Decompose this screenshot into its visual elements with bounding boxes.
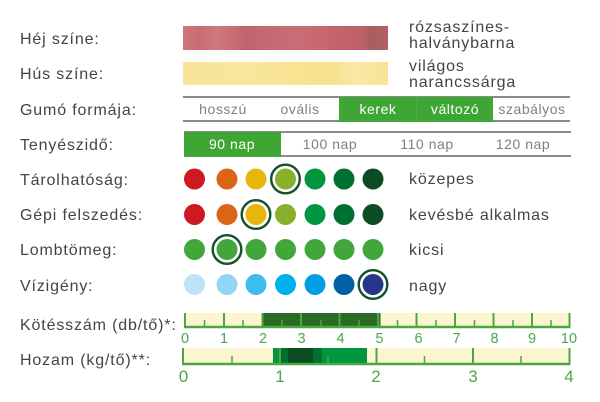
axis labels: 4 bbox=[336, 331, 345, 347]
row: flesh colour bbox=[20, 58, 516, 91]
axis labels: 2 bbox=[259, 331, 267, 347]
option: szabályos: szabályos bbox=[498, 101, 566, 117]
axis labels: 0 bbox=[181, 331, 189, 347]
axis labels: 2 bbox=[371, 367, 381, 386]
axis labels: 1 bbox=[275, 367, 285, 386]
value: flesh colour: világos bbox=[409, 58, 465, 75]
value: skin colour: rózsaszínes- bbox=[409, 19, 510, 36]
row: water demand bbox=[20, 270, 447, 299]
label: flesh colour: Hús színe: bbox=[20, 66, 104, 83]
option: kerek: kerek bbox=[360, 101, 397, 117]
axis labels: 3 bbox=[468, 367, 478, 386]
row: yield bbox=[20, 348, 574, 386]
label: growing period: Tenyészidő: bbox=[20, 137, 114, 154]
scale dots: mechanical harvesting bbox=[184, 200, 384, 229]
option: változó: változó bbox=[431, 101, 479, 117]
option: ovális: ovális bbox=[280, 101, 320, 117]
axis labels bbox=[179, 367, 574, 386]
value: storability: közepes bbox=[409, 171, 475, 188]
swatch: skin colour bbox=[183, 26, 388, 50]
axis labels: 0 bbox=[179, 367, 188, 386]
range bar: 2 to 5 bbox=[262, 313, 380, 327]
row: mechanical harvesting bbox=[20, 200, 550, 229]
option: 120 nap: 120 nap bbox=[496, 136, 550, 152]
axis labels: 10 bbox=[561, 331, 577, 347]
axis labels: 8 bbox=[490, 331, 499, 347]
value: flesh colour: narancssárga bbox=[409, 74, 516, 91]
label: fruit set: Kötésszám (db/tő)*: bbox=[20, 317, 177, 334]
axis labels: 3 bbox=[297, 331, 306, 347]
axis labels: 6 bbox=[414, 331, 423, 347]
selected period segment bbox=[184, 132, 281, 157]
axis labels: 4 bbox=[564, 367, 574, 386]
axis labels: 7 bbox=[452, 331, 461, 347]
axis chart: yield bbox=[179, 348, 574, 386]
value: skin colour: halványbarna bbox=[409, 35, 515, 52]
range bar: yield distribution bbox=[273, 348, 367, 364]
row: storability bbox=[20, 165, 475, 193]
value: water demand: nagy bbox=[409, 278, 447, 295]
option: hosszú: hosszú bbox=[199, 101, 247, 117]
swatch: flesh colour bbox=[183, 62, 388, 85]
label: foliage: Lombtömeg: bbox=[20, 242, 117, 259]
label: tuber shape: Gumó formája: bbox=[20, 102, 137, 119]
selected shape segment bbox=[339, 97, 493, 122]
axis labels: 9 bbox=[528, 331, 536, 347]
label: yield: Hozam (kg/tő)**: bbox=[20, 352, 151, 369]
value: mechanical harvesting: kevésbé alkalmas bbox=[409, 207, 550, 224]
option: 100 nap: 100 nap bbox=[303, 136, 357, 152]
axis labels: 1 bbox=[220, 331, 228, 347]
scale dots: foliage bbox=[184, 235, 384, 264]
label: mechanical harvesting: Gépi felszedés: bbox=[20, 207, 143, 224]
option: 110 nap: 110 nap bbox=[400, 136, 454, 152]
scale dots: storability bbox=[184, 165, 384, 193]
axis chart: fruit set bbox=[181, 313, 577, 347]
axis labels bbox=[181, 331, 577, 347]
label: storability: Tárolhatóság: bbox=[20, 172, 129, 189]
row: tuber shape bbox=[20, 96, 570, 122]
axis labels: 5 bbox=[375, 331, 384, 347]
row: fruit set bbox=[20, 313, 577, 347]
row: growing period bbox=[20, 131, 571, 157]
value: foliage: kicsi bbox=[409, 242, 444, 259]
label: skin colour: Héj színe: bbox=[20, 31, 100, 48]
row: skin colour bbox=[20, 19, 515, 52]
label: water demand: Vízigény: bbox=[20, 278, 93, 295]
option: 90 nap: 90 nap bbox=[209, 136, 255, 152]
scale dots: water demand bbox=[184, 270, 387, 299]
row: foliage bbox=[20, 235, 444, 264]
